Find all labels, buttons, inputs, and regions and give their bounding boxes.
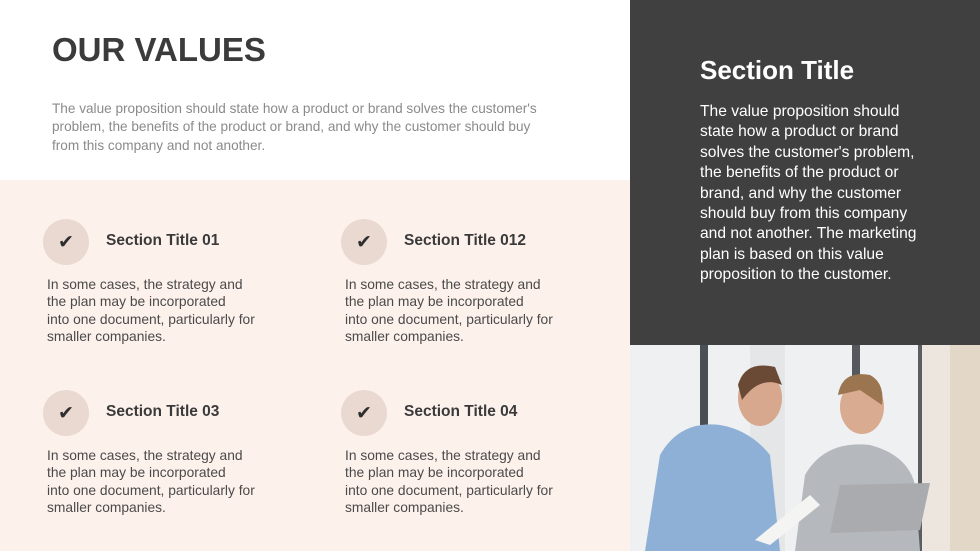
sidebar heading: Section Title <box>700 55 854 85</box>
icon: check <box>341 219 387 265</box>
panel: dark sidebar <box>630 0 980 345</box>
card body: smaller companies. <box>345 500 464 515</box>
card body: into one document, particularly for <box>47 483 255 498</box>
card body: the plan may be incorporated <box>47 465 226 480</box>
card body: smaller companies. <box>47 500 166 515</box>
card body <box>47 277 255 344</box>
sidebar text: state how a product or brand <box>700 123 899 140</box>
photo: two men with laptop <box>630 345 980 551</box>
intro paragraph: problem, the benefits of the product or brand, and why the customer should buy <box>52 119 530 134</box>
sidebar text: the benefits of the product or <box>700 164 899 181</box>
sidebar text: should buy from this company <box>700 205 907 222</box>
card body: the plan may be incorporated <box>345 465 524 480</box>
card 4 <box>341 390 553 515</box>
sidebar text: and not another. The marketing <box>700 225 916 242</box>
card body: into one document, particularly for <box>47 312 255 327</box>
card body: smaller companies. <box>345 329 464 344</box>
card 2 <box>341 219 553 344</box>
intro paragraph: from this company and not another. <box>52 138 265 153</box>
intro paragraph: The value proposition should state how a product or brand solves the customer's <box>52 101 537 116</box>
card body: smaller companies. <box>47 329 166 344</box>
card body <box>345 277 553 344</box>
icon: check: ✔ <box>58 402 74 424</box>
icon: check: ✔ <box>356 402 372 424</box>
sidebar text: proposition to the customer. <box>700 266 892 283</box>
card body: In some cases, the strategy and <box>47 277 243 292</box>
card 1 <box>43 219 255 344</box>
icon: check <box>43 390 89 436</box>
icon: check <box>43 219 89 265</box>
card body <box>345 448 553 515</box>
card title: Section Title 01 <box>106 232 219 249</box>
card body: into one document, particularly for <box>345 312 553 327</box>
sidebar text: The value proposition should <box>700 103 899 120</box>
card body: In some cases, the strategy and <box>345 277 541 292</box>
icon: check: ✔ <box>58 231 74 253</box>
card title: Section Title 04 <box>404 403 517 420</box>
card body <box>47 448 255 515</box>
panel: values background <box>0 180 630 551</box>
intro paragraph <box>52 101 537 153</box>
card body: In some cases, the strategy and <box>345 448 541 463</box>
card 3 <box>43 390 255 515</box>
icon: check: ✔ <box>356 231 372 253</box>
card body: the plan may be incorporated <box>345 294 524 309</box>
title: OUR VALUES <box>52 31 266 68</box>
sidebar text: brand, and why the customer <box>700 185 901 202</box>
card body: In some cases, the strategy and <box>47 448 243 463</box>
sidebar text: plan is based on this value <box>700 246 884 263</box>
card body: into one document, particularly for <box>345 483 553 498</box>
sidebar text: solves the customer's problem, <box>700 144 914 161</box>
card title: Section Title 012 <box>404 232 526 249</box>
icon: check <box>341 390 387 436</box>
sidebar text <box>700 103 916 283</box>
card title: Section Title 03 <box>106 403 219 420</box>
card body: the plan may be incorporated <box>47 294 226 309</box>
